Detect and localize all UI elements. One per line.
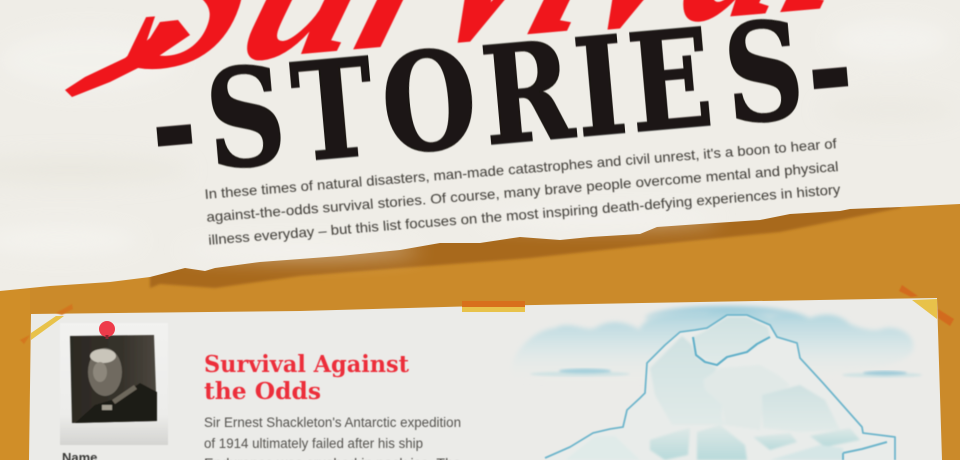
intro paragraph: illness everyday – but this list focuses on the most inspiring death-defying experiences in history	[208, 181, 841, 248]
tape: top left	[20, 304, 73, 344]
red pin	[99, 321, 115, 339]
intro paragraph: against-the-odds survival stories. Of course, many brave people overcome mental and physical	[206, 158, 839, 225]
body text: Sir Ernest Shackleton's Antarctic expedition	[204, 415, 461, 430]
heading: Survival Against the Odds: the Odds	[204, 378, 321, 405]
thin cloud right	[842, 371, 922, 378]
map of Antarctica	[511, 306, 922, 460]
intro paragraph	[204, 135, 841, 248]
land fill	[545, 315, 895, 460]
intro paragraph: In these times of natural disasters, man-made catastrophes and civil unrest, it's a boon to hear of	[204, 135, 837, 202]
portrait	[70, 335, 157, 423]
thin cloud left	[530, 368, 630, 376]
tape: top centre	[462, 301, 525, 312]
ice shelf patches	[565, 317, 860, 460]
torn paper header	[0, 0, 960, 291]
heading: Survival Against the Odds: Survival Against	[204, 351, 409, 378]
coastline	[545, 315, 895, 460]
swash tail of the S	[65, 20, 190, 97]
polaroid photo	[60, 323, 168, 445]
torn paper shadow	[150, 190, 900, 288]
body text: of 1914 ultimately failed after his ship	[204, 436, 423, 451]
paper creases	[0, 20, 960, 258]
note panel	[29, 298, 942, 460]
tape: top right	[899, 285, 954, 326]
heading: Survival Against the Odds	[204, 351, 409, 405]
clouds	[511, 306, 913, 382]
body text	[204, 415, 461, 460]
